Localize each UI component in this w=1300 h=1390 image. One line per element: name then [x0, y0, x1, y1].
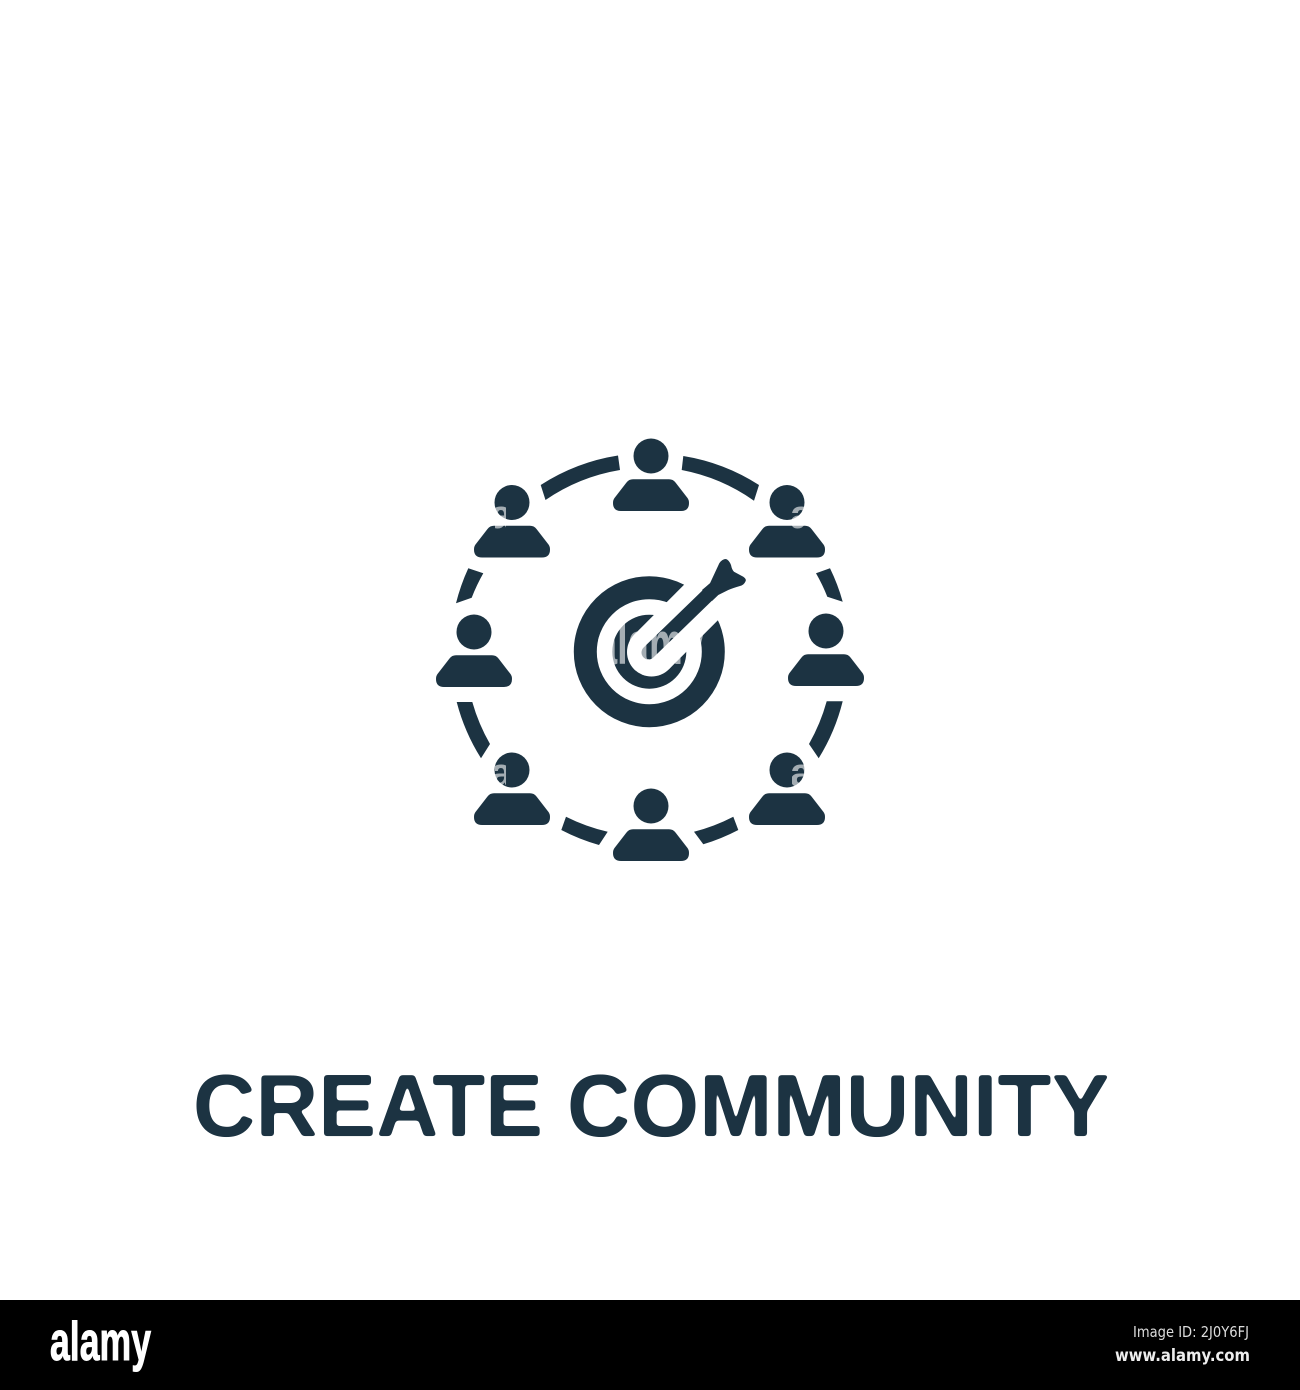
person: top left [474, 485, 550, 558]
image id: Image ID: 2J0Y6FJ [1133, 1323, 1249, 1341]
footer logo: alamy [50, 1310, 151, 1372]
person: top [613, 438, 689, 511]
person: bottom right [749, 752, 825, 825]
dashed ring connecting the people [456, 456, 843, 845]
watermark fragment: bottom right person: a [790, 751, 813, 795]
watermark fragment: top left person: a [490, 493, 513, 537]
title: CREATE [193, 1056, 543, 1155]
person: top right [749, 485, 825, 558]
person: right [788, 614, 864, 686]
person: left [436, 614, 512, 687]
website address: www.alamy.com [1115, 1346, 1250, 1366]
infographic canvas [0, 438, 1300, 1390]
footer bar [0, 1300, 1300, 1390]
icon: community circle around target [436, 438, 864, 861]
title: COMMUNITY [567, 1056, 1110, 1155]
person: bottom [613, 788, 689, 861]
person: bottom left [474, 752, 550, 825]
title [193, 1056, 1110, 1155]
watermark fragment: top right person: a [790, 493, 813, 537]
watermark: alamy over target: alamy [596, 610, 704, 677]
icon: target with arrow [585, 559, 746, 716]
watermark fragment: bottom left person: a [490, 751, 513, 795]
